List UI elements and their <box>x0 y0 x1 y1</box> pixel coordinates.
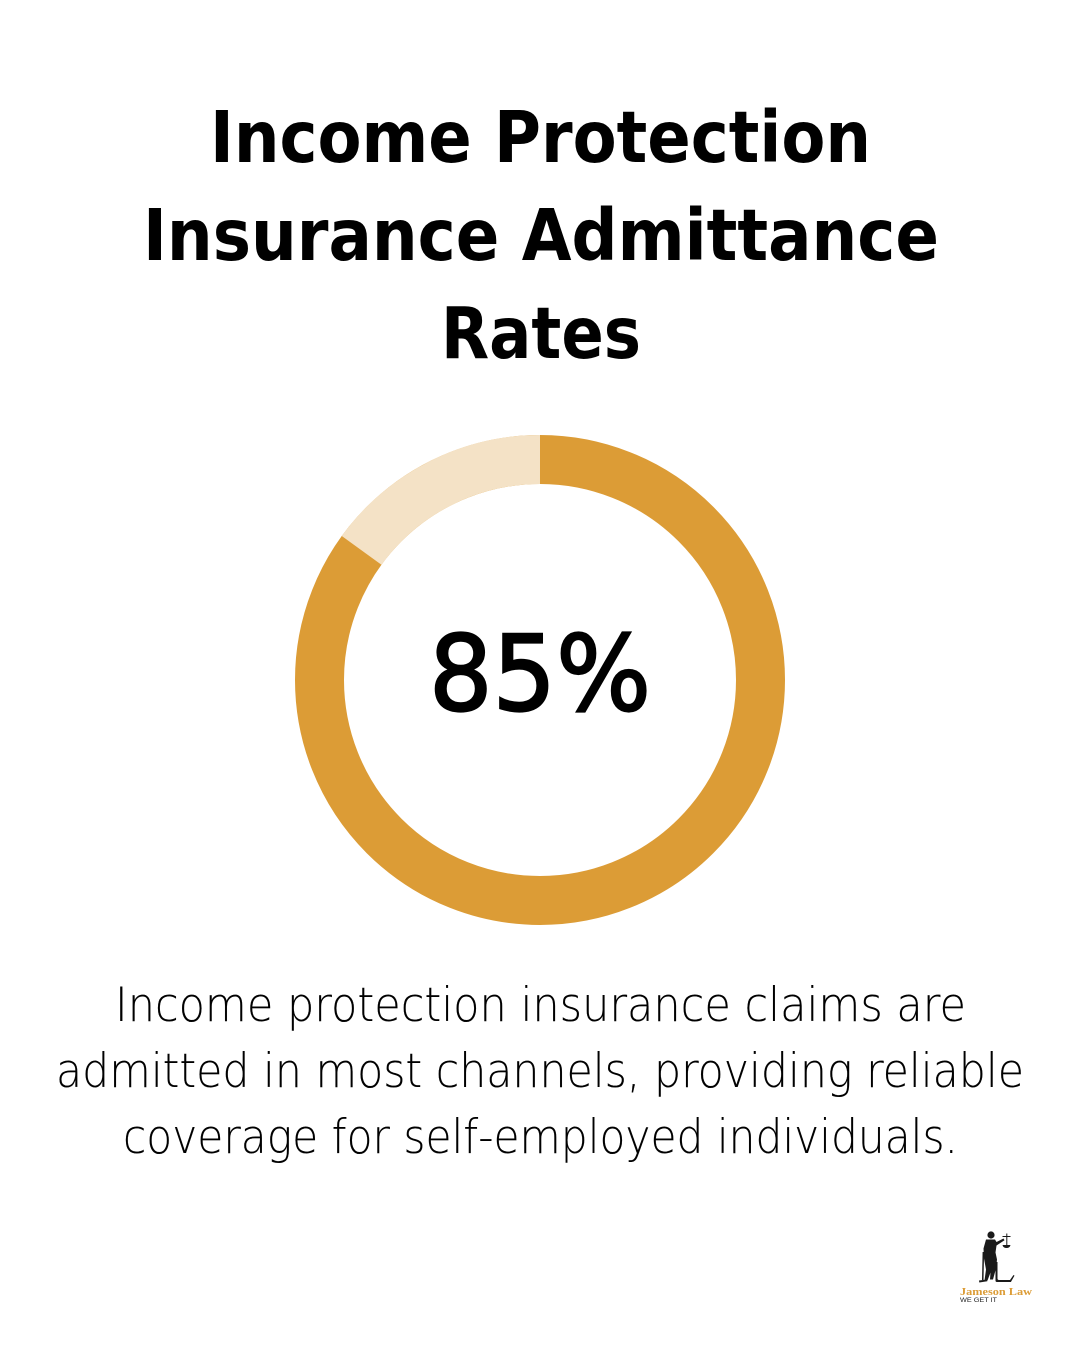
donut chart: 85% <box>320 460 760 900</box>
donut value: 85% <box>429 613 651 735</box>
title <box>143 96 939 375</box>
logo name: Jameson Law <box>960 1287 1032 1298</box>
title: Insurance Admittance <box>143 194 939 277</box>
description: Income protection insurance claims are <box>115 978 966 1033</box>
logo: Jameson Law <box>960 1231 1032 1304</box>
icon: lady justice <box>979 1231 1014 1282</box>
description: coverage for self-employed individuals. <box>123 1110 958 1165</box>
title: Rates <box>441 292 641 375</box>
description <box>56 978 1024 1165</box>
logo tagline: WE GET IT <box>960 1297 997 1304</box>
title: Income Protection <box>210 96 871 179</box>
